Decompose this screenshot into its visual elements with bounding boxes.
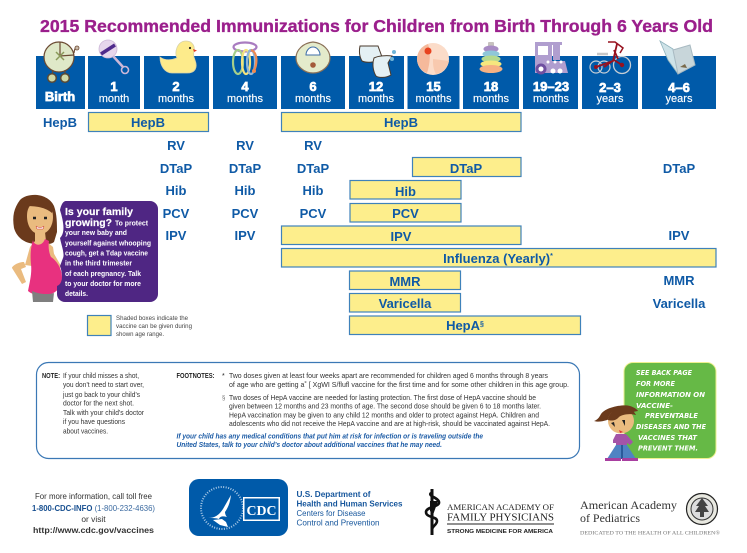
row: HepB: HepB [43, 115, 77, 130]
panel: see back page: SEE BACK PAGE [636, 368, 692, 377]
row: IPV: IPV [166, 228, 187, 243]
legend: vaccine can be given during [116, 324, 192, 330]
footnotes: United States, talk to your child’s doctor about additional vaccines that he may need. [176, 440, 442, 449]
header: 4 months [213, 56, 277, 109]
row: IPV: IPV [669, 228, 690, 243]
row: DTaP [160, 158, 695, 176]
header: 15 months [408, 56, 460, 109]
panel: purple tdap box: cough, get a Tdap vaccine [65, 248, 148, 258]
footnotes: adolescents who did not receive the HepA vaccine and are at high-risk, should be vaccinated against HepA. [229, 419, 550, 428]
header: 2 months: 2 [172, 79, 180, 94]
callout: family growing [12, 195, 158, 302]
row: HepB: HepB [131, 115, 165, 130]
row: RV: RV [167, 138, 185, 153]
row: HepA: HepA [446, 318, 480, 333]
title: 2015 Recommended Immunizations for Children from Birth Through 6 Years Old [40, 16, 713, 36]
logo: CDC: CDC [246, 504, 276, 519]
icon: beach ball [417, 43, 449, 75]
header: 15 months: months [415, 93, 452, 105]
row: Hib: Hib [395, 184, 416, 199]
icon: ring stacker [480, 42, 502, 73]
header: 2 months: months [158, 93, 195, 105]
row: Varicella: Varicella [653, 296, 706, 311]
panel: purple tdap box: Is your family [65, 206, 133, 218]
note: you don’t need to start over, [63, 380, 144, 389]
row: IPV: IPV [235, 228, 256, 243]
header: 18 months: 18 [484, 79, 498, 94]
row: DTaP: DTaP [450, 161, 482, 176]
header: 4-6 years: 4–6 [668, 80, 690, 95]
panel: purple tdap box: of each pregnancy. Talk [65, 269, 141, 278]
row: MMR: MMR [663, 273, 695, 288]
contact information: 1-800-CDC-INFO (1-800-232-4636) [32, 503, 155, 513]
row: DTaP: DTaP [297, 161, 329, 176]
panel: purple tdap box: To protect [115, 218, 149, 228]
footnotes: of age who are getting a˚ [ XgWI S/flufl vaccine for the first time and for some other children in this age group. [229, 380, 569, 389]
header: birth: Birth [45, 89, 75, 104]
row: IPV [166, 226, 690, 244]
contact information: or visit [81, 514, 106, 524]
header: 4-6 years: years [666, 93, 693, 105]
header: 6 months: months [295, 93, 332, 105]
panel: see back page: INFORMATION ON [636, 390, 705, 399]
logo: AAP [580, 494, 720, 536]
row: DTaP: DTaP [160, 161, 192, 176]
logo: AAFP: STRONG MEDICINE FOR AMERICA [447, 529, 553, 535]
age header row [36, 56, 716, 109]
hhs name: Health and Human Services [296, 500, 403, 508]
row: Hib: Hib [166, 183, 187, 198]
footnotes [176, 371, 569, 449]
panel: see back page: DISEASES AND THE [636, 422, 706, 431]
row: Hib: Hib [235, 183, 256, 198]
hhs name: Centers for Disease [296, 509, 366, 518]
row: IPV: IPV [391, 229, 412, 244]
header: 2 months [144, 56, 209, 109]
header: 6 months: 6 [309, 79, 317, 94]
note: doctor for the next shot. [63, 398, 134, 408]
row: MMR [350, 271, 695, 290]
legend: Shaded boxes indicate the [116, 316, 189, 322]
panel: purple tdap box: details. [65, 289, 88, 298]
note: NOTE: [42, 371, 60, 380]
row: HepB [43, 112, 521, 132]
footnotes: Two doses given at least four weeks apart are recommended for children aged 6 months through 8 years [229, 371, 548, 380]
logo: AAFP: FAMILY PHYSICIANS [447, 512, 554, 524]
icon: tricycle [590, 42, 630, 74]
row: Influenza [282, 248, 716, 267]
footnotes: Two doses of HepA vaccine are needed for lasting protection. The first dose of HepA vaccine should be [229, 393, 536, 402]
note: about vaccines. [63, 426, 108, 436]
header: 1 month: 1 [110, 79, 118, 94]
panel: see back page [594, 362, 716, 461]
icon: rattle [99, 40, 128, 74]
footnotes: If your child has any medical conditions that put him at risk for infection or is traveling outside the [176, 432, 483, 440]
panel: see back page: FOR MORE [636, 379, 675, 388]
note: if you have questions [63, 417, 125, 426]
row: HepA: § [480, 321, 484, 328]
row: RV [167, 138, 322, 153]
logo: CDC [189, 479, 288, 536]
row: Hib [166, 180, 461, 199]
hhs name: Control and Prevention [296, 518, 380, 528]
icon: toy train [535, 42, 568, 74]
footnotes: given between 12 months and 23 months of age. The second dose should be given 6 to 18 months later. [229, 402, 541, 410]
row: Varicella: Varicella [379, 296, 432, 311]
footnotes: § [222, 396, 225, 402]
icon: stroller [44, 42, 79, 82]
row: HepB: HepB [384, 115, 418, 130]
row: Influenza: Influenza (Yearly) [443, 251, 550, 266]
header: 4 months: 4 [241, 79, 249, 94]
logo: AAP: American Academy [580, 498, 677, 512]
header: 15 months: 15 [426, 79, 441, 94]
note: If your child misses a shot, [63, 371, 139, 380]
panel: purple tdap box: to your doctor for more [65, 279, 141, 288]
header: 19-23 months: months [533, 93, 570, 105]
row: PCV: PCV [163, 206, 190, 221]
logo: AAFP: AMERICAN ACADEMY OF [447, 503, 555, 512]
row: Varicella [350, 294, 706, 312]
header: 18 months [463, 56, 519, 109]
row: MMR: MMR [389, 274, 421, 289]
header: birth [36, 56, 85, 109]
icon: pregnant woman [12, 195, 62, 302]
row: RV: RV [304, 138, 322, 153]
row: PCV [163, 204, 461, 222]
contact information: For more information, call toll free [35, 491, 152, 501]
panel: purple tdap box: in the third trimester [65, 258, 132, 268]
footnotes: HepA vaccination may be given to any child 12 months and older to protect against HepA. Children and [229, 410, 539, 420]
panel: purple tdap box: your new baby and [65, 228, 127, 237]
header: 18 months: months [473, 93, 510, 105]
header: 2-3 years: 2–3 [599, 80, 621, 95]
icon: duck [160, 41, 197, 73]
row: PCV: PCV [232, 206, 259, 221]
icon: girl [594, 405, 638, 461]
footnotes: * [222, 373, 225, 380]
note: Talk with your child’s doctor [63, 408, 144, 417]
row: PCV: PCV [392, 206, 419, 221]
hhs name: U.S. Department of [296, 490, 371, 499]
header: 12 months: 12 [369, 79, 383, 94]
icon: book [660, 41, 695, 74]
logo: AAP: DEDICATED TO THE HEALTH OF ALL CHILDREN® [580, 530, 720, 536]
panel: see back page: VACCINE- [636, 401, 673, 410]
header: 4 months: months [227, 93, 264, 105]
logo: AAP: of Pediatrics [580, 511, 640, 525]
note [42, 371, 144, 436]
panel: see back page: PREVENT THEM. [638, 444, 698, 452]
panel: see back page: VACCINES THAT [638, 433, 698, 442]
panel: purple tdap box: growing? [65, 217, 112, 229]
panel: see back page: PREVENTABLE [645, 411, 698, 420]
logo: AAFP [426, 489, 555, 535]
panel: notes and footnotes [36, 362, 580, 458]
icon: rings [233, 42, 256, 74]
icon: baby socks [359, 46, 396, 77]
header: 12 months: months [358, 93, 395, 105]
header: 1 month [88, 56, 140, 109]
row: Influenza: * [550, 253, 553, 260]
icon: bib [296, 42, 330, 73]
hhs name [296, 490, 403, 528]
header: 4-6 years [642, 56, 716, 109]
footnotes: FOOTNOTES: [176, 371, 214, 380]
legend [88, 316, 192, 338]
header: 2-3 years [582, 56, 638, 109]
row: HepA [350, 316, 580, 334]
row: Hib: Hib [303, 183, 324, 198]
header: 2-3 years: years [597, 93, 624, 105]
note: just go back to your child’s [62, 390, 140, 399]
header: 19-23 months [523, 56, 578, 109]
header: 19-23 months: 19–23 [533, 79, 569, 94]
contact information [32, 491, 155, 535]
header: 12 months [349, 56, 404, 109]
header: 6 months [281, 56, 345, 109]
legend: shown age range. [116, 332, 164, 338]
vaccine schedule grid [43, 112, 716, 334]
row: DTaP: DTaP [663, 161, 695, 176]
header: 1 month: month [99, 93, 129, 105]
row: PCV: PCV [300, 206, 327, 221]
row: RV: RV [236, 138, 254, 153]
contact information: http://www.cdc.gov/vaccines [33, 525, 154, 535]
panel: purple tdap box: yourself against whooping [65, 238, 151, 248]
row: DTaP: DTaP [229, 161, 261, 176]
panel: purple tdap box [57, 201, 158, 302]
